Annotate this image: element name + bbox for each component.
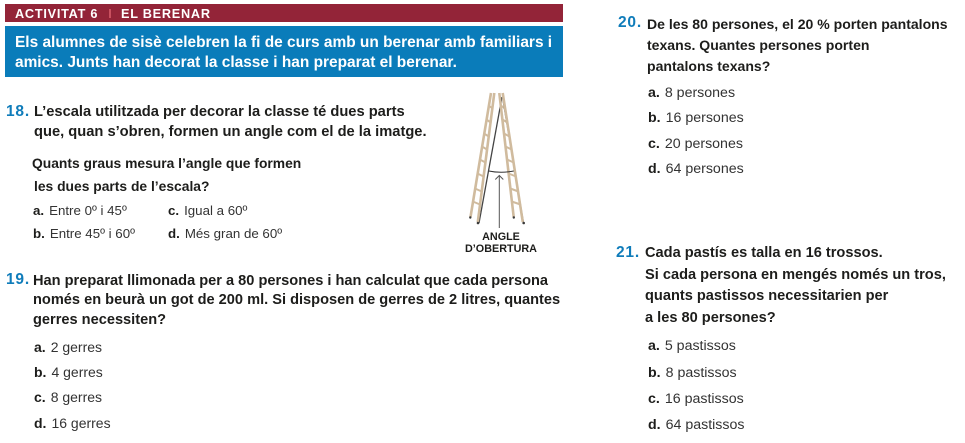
question 21: b. 8 pastissos bbox=[648, 365, 737, 381]
intro panel: amics. Junts han decorat la classe i han preparat el berenar. bbox=[15, 54, 457, 71]
question 18 options: a. Entre 0º i 45º bbox=[33, 203, 127, 218]
question 21 statement: quants pastissos necessitarien per bbox=[645, 288, 888, 304]
question 18 prompt: les dues parts de l’escala? bbox=[34, 178, 209, 194]
question 21: c. 16 pastissos bbox=[648, 391, 744, 407]
question 18 prompt bbox=[32, 155, 301, 194]
label: angle d'obertura bbox=[465, 231, 537, 255]
question 20 statement: pantalons texans? bbox=[647, 58, 770, 74]
question 21 statement: Si cada persona en mengés només un tros, bbox=[645, 266, 946, 282]
question 19 statement bbox=[33, 272, 560, 328]
question 20: c. 20 persones bbox=[648, 136, 743, 152]
question 18 prompt: Quants graus mesura l’angle que formen bbox=[32, 155, 301, 171]
question 20 statement: De les 80 persones, el 20 % porten pantalons bbox=[647, 16, 948, 32]
header bar: activity title: ACTIVITAT 6 bbox=[15, 7, 98, 21]
question 19: c. 8 gerres bbox=[34, 389, 102, 405]
label: angle d'obertura: D’OBERTURA bbox=[465, 243, 537, 255]
question 19 statement: només en beurà un got de 200 ml. Si disposen de gerres de 2 litres, quantes bbox=[33, 292, 560, 308]
question 19: b. 4 gerres bbox=[34, 364, 103, 380]
question 21 statement bbox=[645, 245, 946, 326]
question 18: d. Més gran de 60º bbox=[168, 226, 282, 241]
question 21 number: 21. bbox=[616, 244, 640, 261]
question 19 options: a. 2 gerres bbox=[34, 339, 102, 355]
question 19 bbox=[6, 271, 560, 431]
question 19 number: 19. bbox=[6, 271, 30, 288]
question 18 bbox=[6, 103, 427, 241]
label: angle d'obertura: ANGLE bbox=[482, 231, 520, 243]
question 20 bbox=[618, 14, 948, 177]
question 19 statement: Han preparat llimonada per a 80 persones i han calculat que cada persona bbox=[33, 272, 548, 288]
question 20 options: a. 8 persones bbox=[648, 85, 735, 101]
question 21 statement: Cada pastís es talla en 16 trossos. bbox=[645, 245, 883, 261]
header bar: activity title: EL BERENAR bbox=[121, 7, 211, 21]
question 19: d. 16 gerres bbox=[34, 415, 111, 431]
question 18 statement bbox=[34, 104, 427, 140]
question 20 statement: texans. Quantes persones porten bbox=[647, 37, 869, 53]
question 20 statement bbox=[647, 16, 948, 74]
intro panel: Els alumnes de sisè celebren la fi de curs amb un berenar amb familiars i bbox=[15, 34, 552, 51]
question 21 options: a. 5 pastissos bbox=[648, 338, 736, 354]
intro panel bbox=[5, 26, 563, 77]
question 20 number: 20. bbox=[618, 14, 642, 31]
question 20: b. 16 persones bbox=[648, 110, 744, 126]
question 21 statement: a les 80 persones? bbox=[645, 310, 776, 326]
question 20: d. 64 persones bbox=[648, 161, 744, 177]
question 18: c. Igual a 60º bbox=[168, 203, 247, 218]
question 21 bbox=[616, 244, 946, 433]
question 18 statement: L’escala utilitzada per decorar la classe té dues parts bbox=[34, 104, 405, 120]
question 19 statement: gerres necessiten? bbox=[33, 312, 166, 328]
question 18 statement: que, quan s’obren, formen un angle com el de la imatge. bbox=[34, 124, 427, 140]
question 18 number: 18. bbox=[6, 103, 30, 120]
header bar: activity title bbox=[5, 4, 563, 22]
illustration: ladder with opening angle bbox=[469, 92, 525, 228]
question 18: b. Entre 45º i 60º bbox=[33, 226, 135, 241]
question 21: d. 64 pastissos bbox=[648, 417, 744, 433]
